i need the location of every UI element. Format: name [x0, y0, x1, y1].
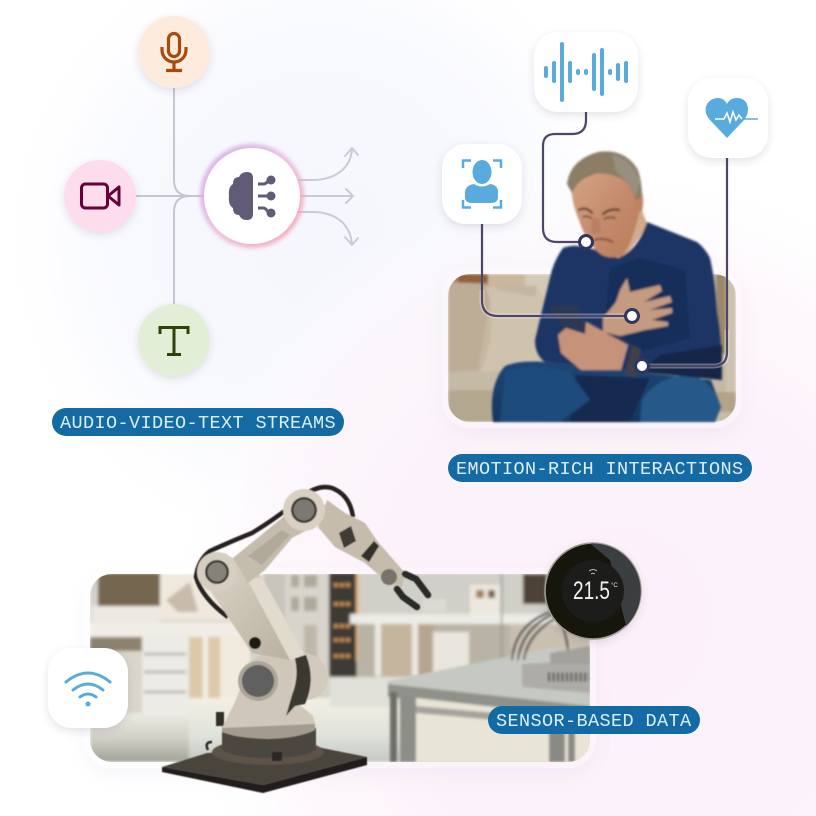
connector lines — [136, 88, 206, 304]
shoulder upper joint — [197, 552, 237, 592]
upper arm — [233, 497, 327, 583]
forearm — [318, 500, 405, 587]
connector lines — [482, 290, 727, 366]
back robot — [166, 582, 198, 612]
desk — [90, 621, 241, 638]
watch — [625, 345, 641, 378]
temperature reading: 21.5 — [573, 577, 610, 605]
icon: small wifi — [589, 570, 597, 574]
rear drum — [292, 653, 328, 702]
equipment box — [522, 660, 590, 693]
panel: emotion-rich interactions — [442, 32, 768, 482]
output arrows — [296, 148, 358, 245]
shoulder joint — [238, 661, 278, 701]
label: sensor-based data: SENSOR-BASED DATA — [496, 711, 692, 732]
card: wifi — [48, 648, 128, 728]
elbow joint — [283, 489, 325, 531]
neck — [585, 205, 648, 258]
card: face scan — [442, 144, 522, 224]
connector dots — [580, 236, 648, 372]
face — [571, 168, 640, 257]
turntable ring — [222, 722, 315, 739]
door — [262, 574, 286, 619]
thermostat — [545, 543, 641, 639]
panel: audio-video-text streams — [52, 16, 358, 436]
base plate — [162, 747, 367, 785]
wrist joint — [381, 569, 397, 585]
phone hand — [558, 322, 628, 370]
server rack — [329, 573, 357, 677]
shoulder body — [222, 653, 315, 728]
icon: text — [138, 304, 210, 376]
hair — [567, 151, 642, 200]
icon: video camera — [64, 160, 136, 232]
back bench — [350, 614, 590, 624]
floor — [90, 713, 190, 762]
phone — [550, 305, 590, 338]
lower arm — [207, 553, 305, 660]
icon: brain network — [229, 172, 276, 220]
facial features — [579, 209, 619, 242]
label: emotion-rich interactions: EMOTION-RICH INTERACTIONS — [456, 459, 744, 480]
photo: laboratory background — [90, 573, 590, 762]
jeans — [492, 362, 721, 422]
icon: microphone — [138, 16, 210, 88]
base cylinder — [212, 739, 324, 765]
cable — [196, 487, 353, 617]
monitor — [98, 573, 160, 606]
foreground table — [388, 648, 590, 706]
label: audio-video-text streams: AUDIO-VIDEO-TEXT STREAMS — [60, 413, 336, 434]
robot arm — [162, 487, 428, 793]
back wall — [360, 574, 547, 576]
central AI hub — [200, 144, 304, 248]
temperature unit: °C — [611, 583, 618, 589]
card: voice waveform — [534, 32, 638, 112]
card: heart rate — [688, 78, 768, 158]
panel: sensor-based data — [48, 487, 700, 793]
label: sensor-based data — [488, 706, 700, 734]
sweater — [535, 222, 722, 380]
photo: man (extends above frame) — [492, 151, 722, 422]
photo frame — [442, 268, 742, 428]
gripper — [397, 574, 428, 607]
photo: sofa background — [448, 274, 736, 422]
wall items — [470, 585, 500, 615]
photo frame — [84, 568, 596, 768]
cable connector — [207, 742, 212, 750]
cables — [512, 612, 568, 660]
chest hand — [603, 278, 672, 336]
